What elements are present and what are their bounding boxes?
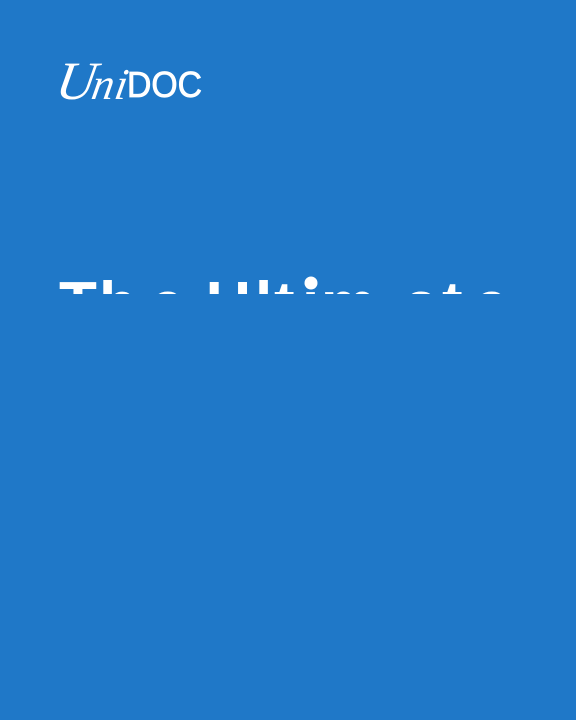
title: clipped heading: The Ultimate bbox=[59, 270, 508, 339]
panel: blue cover background bbox=[60, 64, 500, 294]
logo script: Uni: n bbox=[88, 59, 119, 109]
logo: UniDOC bbox=[52, 51, 202, 111]
title: clipped heading bbox=[60, 276, 500, 294]
logo script: Uni: i bbox=[111, 59, 132, 109]
logo script: Uni: U bbox=[52, 51, 105, 111]
logo wordmark: DOC: DOC bbox=[127, 64, 202, 105]
